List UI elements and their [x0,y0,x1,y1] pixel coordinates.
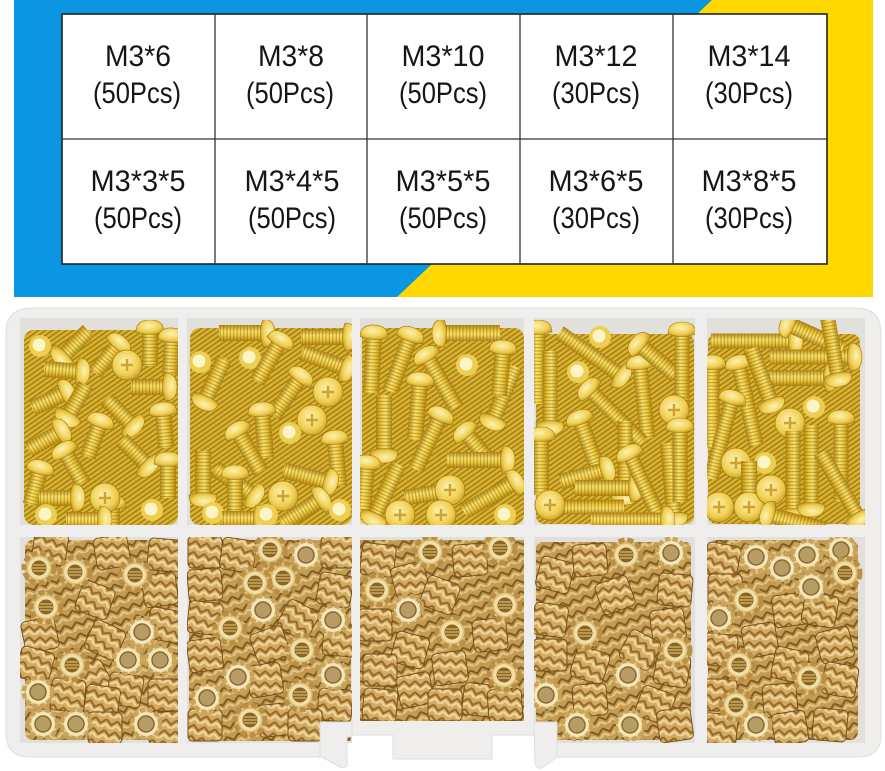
compartment: M3*5*5 brass inserts [358,533,524,722]
cell: M3*8: M3*8 [258,40,324,73]
cell: M3*5*5: (50Pcs) [399,202,487,235]
cell: M3*4*5: M3*4*5 [244,165,340,198]
cell: M3*8*5 [702,165,796,235]
cell: M3*12: (30Pcs) [552,77,640,110]
cell: M3*3*5: (50Pcs) [94,202,182,235]
cell: M3*8*5: M3*8*5 [702,165,796,198]
compartment: M3*10 screws [360,320,524,525]
cell: M3*8*5: (30Pcs) [705,202,793,235]
cell: M3*6 [93,40,181,110]
cell: M3*12 [552,40,640,110]
cell: M3*10 [399,40,487,110]
cell: M3*6*5: M3*6*5 [548,165,644,198]
compartment: M3*4*5 brass inserts [186,535,358,741]
cell: M3*6*5: (30Pcs) [552,202,640,235]
cell: M3*6*5 [548,165,644,235]
compartment: M3*6*5 brass inserts [531,539,694,743]
cell: M3*5*5 [396,165,490,235]
lid clasp wings [320,722,557,768]
blue and yellow banner [14,0,873,297]
cell: M3*3*5 [90,165,186,235]
cell: M3*10: M3*10 [402,40,484,73]
cell: M3*8 [246,40,334,110]
plastic storage box [6,308,881,768]
compartment: M3*8 screws [188,319,359,536]
cell: M3*8: (50Pcs) [246,77,334,110]
cell: M3*6: M3*6 [105,40,171,73]
compartment: M3*12 screws [534,320,695,525]
cell: M3*4*5 [244,165,340,235]
specification table [62,14,827,264]
cell: M3*10: (50Pcs) [399,77,487,110]
cell: M3*3*5: M3*3*5 [90,165,186,198]
cell: M3*4*5: (50Pcs) [248,202,336,235]
compartment: M3*14 screws [707,320,865,525]
cell: M3*14 [705,40,793,110]
compartment: M3*8*5 brass inserts [701,536,860,748]
compartment: M3*3*5 brass inserts [20,537,178,743]
compartment: M3*6 screws [23,320,178,525]
cell: M3*5*5: M3*5*5 [396,165,490,198]
cell: M3*14: M3*14 [708,40,790,73]
cell: M3*6: (50Pcs) [93,77,181,110]
cell: M3*14: (30Pcs) [705,77,793,110]
cell: M3*12: M3*12 [554,40,638,73]
